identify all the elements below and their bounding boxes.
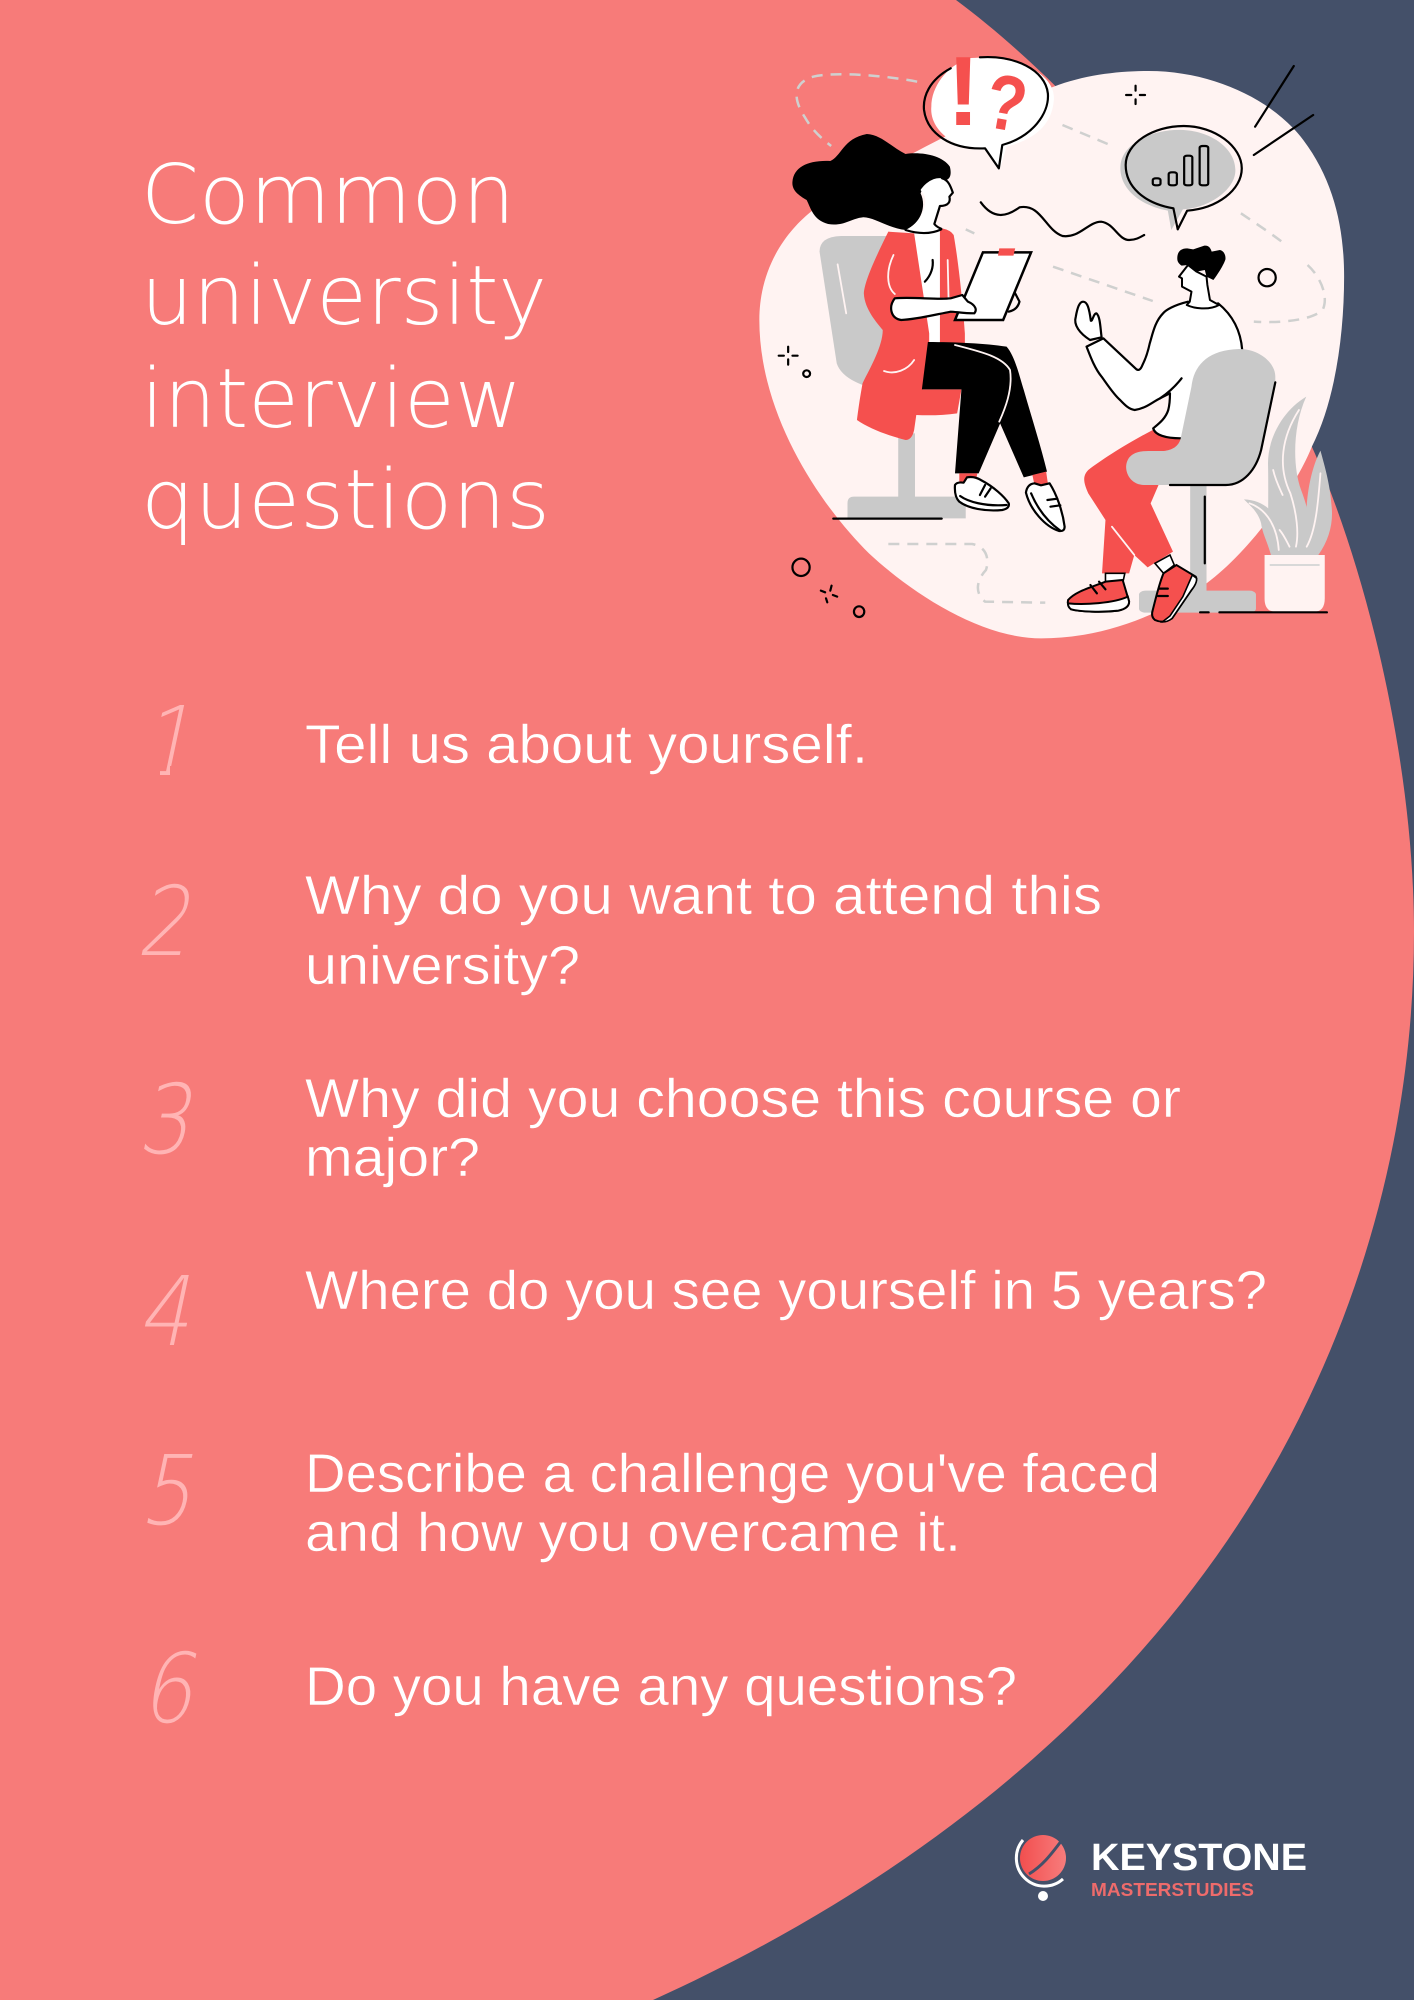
shirt [913, 232, 940, 343]
question 1: Tell us about yourself. [305, 713, 868, 775]
question list [131, 687, 1267, 1745]
question 4: 4 [132, 1257, 208, 1368]
question 2: 2 [131, 867, 207, 978]
arm [891, 295, 976, 320]
woman seated with clipboard [792, 134, 1065, 531]
decorative lines, sparkles and circles [779, 66, 1313, 617]
question 1 [135, 687, 868, 798]
question 5 [134, 1436, 1160, 1563]
question 3 [132, 1065, 1181, 1188]
sweater [1087, 302, 1242, 438]
man's shoes [1068, 565, 1197, 622]
socks [1105, 555, 1174, 583]
question 1: 1 [135, 687, 211, 798]
speech bubble: signal bars [1120, 126, 1242, 230]
face and neck [1179, 265, 1219, 308]
question 3: 3 [132, 1065, 208, 1176]
illustration: interview scene [759, 57, 1344, 638]
jacket [857, 228, 965, 440]
question 2 [131, 864, 1102, 996]
speech bubble: question [924, 57, 1054, 168]
question 5: 5 [134, 1436, 210, 1547]
title: university [141, 249, 547, 344]
squiggle line [981, 202, 1144, 240]
man's chair [1126, 349, 1275, 613]
trousers [1084, 430, 1187, 573]
background blob [759, 71, 1344, 638]
question 2: Why do you want to attend this [305, 864, 1102, 926]
title [141, 148, 550, 548]
face and neck [906, 178, 953, 233]
title: questions [141, 453, 550, 548]
potted plant [1244, 397, 1332, 612]
dashed paths [797, 74, 1325, 603]
question 6: 6 [135, 1634, 211, 1745]
woman's chair [820, 236, 966, 519]
tagline: MASTERSTUDIES [1091, 1880, 1254, 1900]
man seated on chair [1075, 246, 1242, 583]
socks [959, 472, 1048, 485]
logo: Keystone Masterstudies [1016, 1835, 1307, 1901]
speech bubble symbols [947, 36, 1034, 150]
question 3: major? [305, 1126, 480, 1188]
jacket details [884, 255, 949, 372]
wordmark: KEYSTONE [1091, 1837, 1307, 1879]
trousers [922, 342, 1047, 477]
speech bubble symbols: ? [979, 56, 1034, 150]
question 3: Why did you choose this course or [305, 1067, 1181, 1129]
clipboard [955, 248, 1031, 320]
title: Common [141, 148, 515, 243]
hair [792, 134, 951, 230]
hair [1177, 246, 1225, 280]
question 2: university? [305, 934, 580, 996]
floor line [1200, 611, 1327, 613]
question 5: and how you overcame it. [305, 1501, 961, 1563]
question 4 [132, 1257, 1267, 1368]
question 5: Describe a challenge you've faced [305, 1442, 1160, 1504]
icon: globe [1016, 1835, 1066, 1901]
question 4: Where do you see yourself in 5 years? [305, 1259, 1267, 1321]
title: interview [141, 352, 522, 447]
hand [1075, 302, 1102, 340]
speech bubble symbols: ! [947, 36, 980, 146]
question 6: Do you have any questions? [305, 1655, 1017, 1717]
question 6 [135, 1634, 1017, 1745]
shoes [955, 477, 1065, 531]
